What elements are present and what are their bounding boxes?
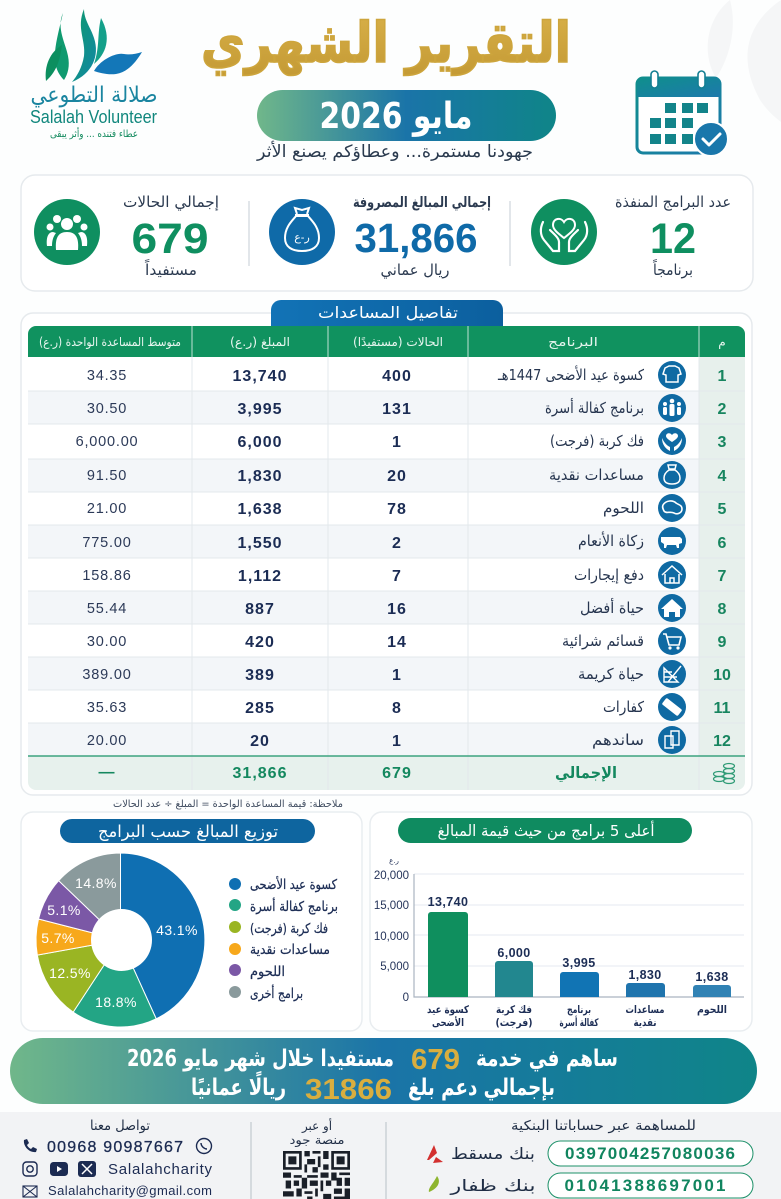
bar chart: اللحوم: [697, 1004, 727, 1016]
bar chart: 20,000: [374, 870, 409, 882]
row 4: 91.50: [87, 468, 127, 484]
bar chart: 6,000: [497, 946, 531, 960]
row 6: 775.00: [82, 535, 132, 551]
QR code: [283, 1151, 350, 1199]
row 6: [82, 527, 727, 555]
total row: 679: [382, 765, 412, 782]
stat: total cases: [123, 193, 219, 279]
donut chart: 12.5%: [49, 965, 91, 981]
icon: instagram: [23, 1162, 37, 1176]
table header: [28, 326, 745, 357]
row 10: 389: [245, 667, 275, 684]
bar chart: 10,000: [374, 931, 409, 943]
bank accounts: 0397004257080036: [565, 1144, 735, 1163]
table row backgrounds: [28, 357, 745, 790]
row 11: [87, 693, 731, 721]
row 11: 35.63: [87, 700, 127, 716]
row 11: 285: [245, 700, 275, 717]
total row: الإجمالي: [555, 763, 617, 783]
row 7: دفع إيجارات: [574, 566, 644, 584]
logo Arabic name: صلالة التطوعي: [30, 83, 158, 108]
donut chart: 43.1%: [156, 922, 198, 938]
donut chart: 14.8%: [75, 875, 117, 891]
logo English name: Salalah Volunteer: [30, 107, 157, 127]
contact details: تواصل معنا: [90, 1118, 150, 1134]
bar chart heading: أعلى 5 برامج من حيث قيمة المبالغ: [438, 820, 654, 841]
row 7: 7: [718, 568, 727, 585]
stat: programs: [615, 193, 731, 279]
row 7: 158.86: [82, 568, 132, 584]
bar chart: برنامج: [567, 1004, 591, 1016]
row 10: حياة كريمة: [578, 665, 644, 683]
row 9: 420: [245, 634, 275, 651]
row 2: 30.50: [87, 401, 127, 417]
total row: 31,866: [233, 765, 287, 782]
row 2: 3,995: [237, 401, 283, 418]
donut legend: اللحوم: [250, 964, 285, 980]
bar chart: ر.ع: [389, 857, 399, 865]
bar chart: فك كربة: [496, 1004, 532, 1016]
bar chart: نقدية: [634, 1017, 657, 1029]
row 7: 7: [392, 568, 402, 585]
footer: [0, 1112, 781, 1199]
subtitle: جهودنا مستمرة... وعطاؤكم يصنع الأثر: [256, 141, 533, 162]
icon: envelope: [23, 1186, 37, 1197]
banner line 2: ريالًا عمانيًا: [191, 1071, 286, 1101]
jood platform: منصة جود: [290, 1133, 344, 1148]
stat: total cases: 679: [132, 215, 208, 263]
jood platform: [283, 1118, 350, 1199]
table header: متوسط المساعدة الواحدة (ر.ع): [39, 335, 181, 350]
contact details: Salalahcharity: [108, 1161, 212, 1178]
note: ملاحظة: قيمة المساعدة الواحدة = المبلغ ÷ عدد الحالات: [113, 799, 343, 810]
bar chart: 15,000: [374, 900, 409, 912]
contact details: Salalahcharity@gmail.com: [48, 1183, 212, 1198]
banner line 1: 679: [411, 1044, 460, 1076]
bar chart heading: [398, 818, 692, 843]
row 3: [76, 427, 727, 455]
row 1: كسوة عيد الأضحى 1447هـ: [497, 365, 645, 384]
panel: distribution donut chart: [21, 812, 362, 1031]
row 10: 10: [713, 667, 731, 684]
row 5: [87, 494, 727, 522]
icon: youtube: [50, 1162, 68, 1176]
row 1: 34.35: [87, 368, 127, 384]
bar chart: 3,995: [562, 956, 596, 970]
bank accounts: [427, 1118, 753, 1198]
stat: total amount: [353, 195, 491, 280]
row 3: 6,000.00: [76, 434, 138, 450]
row 10: 1: [392, 667, 402, 684]
donut heading: توزيع المبالغ حسب البرامج: [98, 822, 278, 842]
donut legend: كسوة عيد الأضحى: [250, 876, 337, 893]
row 1: 13,740: [233, 368, 287, 385]
row 12: 12: [713, 733, 731, 750]
row 7: 1,112: [238, 568, 282, 585]
banner line 1: مستفيدا خلال شهر مايو 2026: [127, 1046, 394, 1072]
row 8: 16: [387, 601, 407, 618]
stat: total amount: إجمالي المبالغ المصروفة: [353, 195, 491, 211]
bar chart: 5,000: [380, 961, 409, 973]
row 2: 131: [382, 401, 412, 418]
stat: programs: عدد البرامج المنفذة: [615, 193, 731, 211]
row 2: [87, 394, 727, 422]
panel: top 5 bar chart: [370, 812, 752, 1031]
row 12: ساندهم: [592, 731, 644, 749]
icon: calendar: [637, 71, 728, 156]
row 4: 4: [718, 468, 727, 485]
row 9: 30.00: [87, 634, 127, 650]
table section tab: تفاصيل المساعدات: [318, 303, 458, 322]
row 7: [82, 561, 727, 589]
row 5: 78: [387, 501, 407, 518]
row 3: 6,000: [237, 434, 283, 451]
row 6: 1,550: [237, 535, 283, 552]
bar chart: 1,638: [695, 970, 729, 984]
row 5: اللحوم: [603, 499, 644, 517]
banner line 1: [127, 1044, 618, 1076]
row 5: 21.00: [87, 501, 127, 517]
logo mark: leaves: [46, 9, 142, 82]
icon: whatsapp: [196, 1138, 212, 1154]
table section tab: [271, 300, 503, 326]
table header: الحالات (مستفيدًا): [353, 335, 443, 349]
row 4: 1,830: [237, 468, 283, 485]
row 3: 1: [392, 434, 402, 451]
row 8: 887: [245, 601, 275, 618]
row 12: 1: [392, 733, 402, 750]
row 4: [87, 461, 727, 489]
month pill: [257, 90, 556, 141]
icon: phone: [24, 1139, 37, 1152]
bar chart: [374, 857, 744, 1029]
donut chart: 5.1%: [47, 902, 81, 918]
row 3: فك كربة (فرجت): [550, 432, 644, 450]
donut chart: 18.8%: [95, 994, 137, 1010]
table header: البرنامج: [548, 335, 598, 350]
bar chart: كفالة أسرة: [560, 1015, 599, 1029]
bank accounts: بنك مسقط: [451, 1144, 535, 1163]
row 6: زكاة الأنعام: [578, 531, 644, 550]
donut legend: [229, 876, 338, 1002]
month text: مايو 2026: [320, 96, 472, 137]
row 1: 400: [382, 368, 412, 385]
contact details: 00968 90987667: [47, 1139, 183, 1156]
stat: total cases: مستفيداً: [144, 259, 197, 279]
bar chart: كسوة عيد: [427, 1004, 470, 1016]
row 9: [87, 627, 727, 655]
panel: summary stats: [21, 175, 753, 291]
title: التقرير الشهري: [201, 11, 571, 76]
table header: م: [718, 335, 726, 349]
row 10: [82, 660, 731, 688]
row 12: [87, 726, 731, 754]
total row: —: [98, 764, 116, 781]
jood platform: أو عبر: [301, 1118, 332, 1134]
stat: total cases: إجمالي الحالات: [123, 193, 219, 212]
row 4: مساعدات نقدية: [549, 466, 644, 484]
icon: x: [78, 1161, 96, 1177]
table header: المبلغ (ر.ع): [230, 335, 290, 350]
donut legend: مساعدات نقدية: [250, 942, 330, 958]
contact details: [23, 1118, 212, 1198]
banner line 1: ساهم في خدمة: [476, 1046, 618, 1072]
donut chart: 5.7%: [41, 930, 75, 946]
row 2: 2: [718, 401, 727, 418]
row 8: 55.44: [87, 601, 127, 617]
row 11: كفارات: [603, 698, 645, 716]
donut chart: [36, 853, 205, 1027]
logo slogan: عطاء فتنده ... وأثر يبقى: [50, 127, 138, 140]
row 12: 20: [250, 733, 270, 750]
icon: hands holding heart: [531, 199, 597, 265]
row 6: 2: [392, 535, 402, 552]
stat: total amount: ريال عماني: [380, 261, 450, 280]
stat: programs: 12: [650, 215, 696, 263]
row 9: قسائم شرائية: [562, 632, 644, 650]
row 5: 5: [718, 501, 727, 518]
donut heading: [60, 819, 315, 843]
row 2: برنامج كفالة أسرة: [545, 398, 644, 417]
bar chart: 1,830: [628, 968, 662, 982]
donut legend: برامج أخرى: [250, 984, 303, 1002]
icon: money bag: [269, 199, 335, 265]
row 4: 20: [387, 468, 407, 485]
stat: total amount: 31,866: [354, 215, 478, 261]
row 1: 1: [718, 368, 727, 385]
row 1: [87, 361, 727, 389]
icon: people group: [34, 199, 100, 265]
row 12: 20.00: [87, 733, 127, 749]
watermark leaf: [708, 0, 781, 122]
bar chart: (فرجت): [496, 1017, 532, 1029]
row 3: 3: [718, 434, 727, 451]
bank accounts: بنك ظفار: [449, 1176, 536, 1196]
bar chart: 0: [403, 992, 409, 1004]
icon: money bag: ر-ع: [294, 232, 310, 244]
row 8: حياة أفضل: [580, 598, 644, 617]
panel: assistance table: [21, 300, 752, 795]
donut legend: برنامج كفالة أسرة: [250, 897, 338, 915]
row 8: [87, 594, 727, 622]
banner line 2: بإجمالي دعم بلغ: [408, 1075, 555, 1101]
bar chart: 13,740: [428, 895, 468, 909]
donut legend: فك كربة (فرجت): [250, 921, 328, 937]
bank accounts: 01041388697001: [564, 1176, 726, 1195]
banner: [10, 1038, 757, 1106]
logo: [30, 9, 158, 140]
row 11: 8: [392, 700, 402, 717]
row 6: 6: [718, 535, 727, 552]
total row: [98, 763, 734, 784]
banner line 2: [191, 1071, 555, 1106]
row 10: 389.00: [82, 667, 132, 683]
row 5: 1,638: [237, 501, 283, 518]
bank accounts: للمساهمة عبر حساباتنا البنكية: [511, 1118, 696, 1134]
row 8: 8: [718, 601, 727, 618]
stat: programs: برنامجاً: [652, 259, 693, 279]
bar chart: مساعدات: [626, 1004, 664, 1016]
row 11: 11: [714, 700, 731, 717]
bar chart: الأضحى: [432, 1016, 464, 1029]
banner line 2: 31866: [305, 1074, 392, 1106]
row 9: 9: [718, 634, 727, 651]
row 9: 14: [387, 634, 407, 651]
